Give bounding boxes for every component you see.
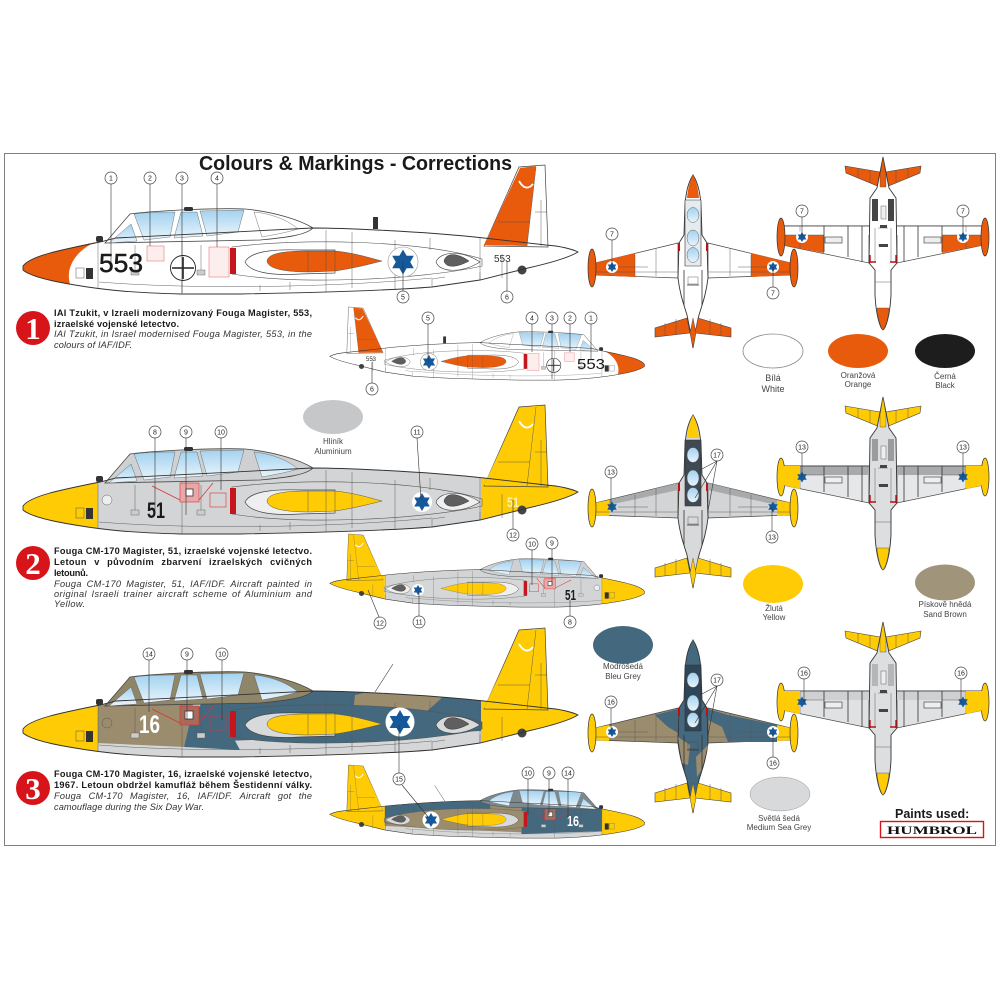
humbrol logo [880,822,984,838]
callouts aircraft 3 side: 14 [145,651,153,658]
callouts aircraft 3 side: 10 [218,651,226,658]
swatch yellow [743,565,803,622]
aircraft 2 side view, small [330,534,644,629]
swatch bleu grey [593,626,653,681]
aircraft 2 side view, small: 9 [550,540,554,547]
humbrol logo: HUMBROL [887,825,977,837]
swatch sand brown [915,564,975,619]
sheet frame [4,154,996,846]
callouts aircraft 2 top: 13 [607,469,615,476]
badge 2 [16,546,50,581]
swatch yellow: Yellow [763,613,786,622]
paints used label: Paints used: [895,807,969,821]
swatch bleu grey: Modrošedá [603,662,644,671]
callouts aircraft 2 top: 13 [768,534,776,541]
badge 1 [16,311,50,346]
swatch aluminium [303,400,363,456]
swatch black: Černá [934,372,956,381]
callouts aircraft 2 underside [796,441,969,477]
aircraft 1 side view, small: 6 [370,386,374,393]
callouts aircraft 2 side: 11 [413,429,421,436]
caption 2: Yellow. [54,599,85,609]
callouts aircraft 2 top: 17 [713,452,721,459]
tail number 51: 51 [507,494,519,510]
callouts aircraft 3 underside [798,667,967,702]
callouts aircraft 3 top: 16 [769,760,777,767]
swatch aluminium: Hliník [323,437,344,446]
swatch sand brown: Pískově hnědá [919,600,972,609]
aircraft 1 underside view: 7 [961,208,965,215]
roundel [388,247,418,277]
aircraft 2 side view, small: 10 [528,541,536,548]
aircraft 3 side view, small: 10 [524,770,532,777]
callouts aircraft 2 side: 8 [153,429,157,436]
aircraft 2 top view [588,415,798,588]
aircraft 2 side view, small: 12 [376,620,384,627]
caption 1 [54,308,312,350]
stencil markings [147,246,229,277]
swatch medium sea grey: Medium Sea Grey [747,823,811,832]
aircraft 1 top view [588,175,798,348]
roundel 3 [386,708,414,736]
callouts aircraft 3 top: 17 [713,677,721,684]
badge 3: 3 [25,771,41,806]
swatch black [915,334,975,390]
aircraft 2 side view, small: 8 [568,619,572,626]
callouts aircraft 3 side [143,648,405,785]
callouts aircraft 3 underside: 16 [957,670,965,677]
swatch white: White [761,384,785,394]
callouts aircraft 2 side [149,426,519,541]
aircraft 1 side view, large [23,165,578,294]
tail number: 553 [494,254,511,265]
aircraft 1 top view: 7 [610,231,614,238]
swatch orange [828,334,888,389]
aircraft 1 side view, small: 5 [426,315,430,322]
swatch black: Black [935,381,956,390]
caption 3: 1967. Letoun obdržel kamufláž během Šestidenní války. [54,779,312,790]
black emblem [170,256,196,280]
aircraft 1 top view: 7 [771,290,775,297]
callouts aircraft 1 side: 3 [180,175,184,182]
callouts aircraft 1 side: 6 [505,294,509,301]
swatch white: Bílá [765,373,781,383]
roundel 2 [412,492,432,512]
caption 2: Fouga CM-170 Magister, 51, izraelské vojenské letectvo. [54,546,312,556]
aircraft 1 side view, small: 3 [550,315,554,322]
aircraft 1 side view, small: 2 [568,315,572,322]
aircraft 3 side view, large [23,628,578,757]
callouts aircraft 2 top [605,449,778,543]
aircraft 3 underside view [777,622,989,795]
caption 1: colours of IAF/IDF. [54,340,132,350]
aircraft 3 side view, small: 16 [567,813,579,830]
badge 2: 2 [25,546,41,581]
swatch medium sea grey: Světlá šedá [758,814,800,823]
callouts aircraft 2 underside: 13 [798,444,806,451]
caption 3 [54,769,312,812]
caption 3: Fouga CM-170 Magister, 16, izraelské vojenské letectvo, [54,769,312,779]
aircraft 1 side view, small [330,307,644,395]
badge 3 [16,771,50,806]
title: Colours & Markings - Corrections [199,153,512,175]
number 51: 51 [147,498,165,523]
callouts aircraft 2 side: 9 [184,429,188,436]
callouts aircraft 3 side: 9 [185,651,189,658]
aircraft 3 side view, small: 14 [564,770,572,777]
aircraft 1 side view, small: 4 [530,315,534,322]
caption 1: izraelské vojenské letectvo. [54,319,179,329]
caption 3: camouflage during the Six Day War. [54,802,204,812]
callouts aircraft 1 side: 5 [401,294,405,301]
caption 1: IAI Tzukit, in Israel modernised Fouga Magister, 553, in the [54,329,312,339]
aircraft 2 side view, small: 11 [415,619,423,626]
callouts aircraft 1 side: 1 [109,175,113,182]
callouts aircraft 3 top: 16 [607,699,615,706]
callouts aircraft 2 underside: 13 [959,444,967,451]
callouts aircraft 1 side: 2 [148,175,152,182]
aircraft 3 side view, small [330,765,644,838]
aircraft 1 underside view [777,157,989,330]
swatch white [743,334,803,394]
swatch yellow: Žlutá [765,604,783,613]
swatch sand brown: Sand Brown [923,610,967,619]
aircraft 1 side view, small: 553 [366,357,377,363]
callouts aircraft 1 side [105,172,513,303]
swatch medium sea grey [747,777,811,832]
swatch orange: Oranžová [841,371,876,380]
caption 1: IAI Tzukit, v Izraeli modernizovaný Fouga Magister, 553, [54,308,312,318]
aircraft 2 side view, large [23,405,578,534]
aircraft 3 side view, small: 9 [547,770,551,777]
caption 2: original Israeli trainer aircraft scheme of Aluminium and [54,589,313,599]
callouts aircraft 1 side: 4 [215,175,219,182]
callouts aircraft 3 underside: 16 [800,670,808,677]
caption 2: letounů. [54,568,88,578]
callouts aircraft 2 side: 10 [217,429,225,436]
aircraft 3 top view [588,640,798,813]
badge 1: 1 [25,311,41,346]
callouts aircraft 2 side: 12 [509,532,517,539]
swatch aluminium: Aluminium [314,447,352,456]
aircraft 2 underside view [777,397,989,570]
swatch orange: Orange [845,380,872,389]
callouts aircraft 3 side: 15 [395,776,403,783]
aircraft 2 side view, small: 51 [565,587,576,604]
number 16: 16 [139,711,160,739]
caption 3: Fouga CM-170 Magister, 16, IAF/IDF. Aircraft got the [54,791,312,801]
caption 2: Fouga CM-170 Magister, 51, IAF/IDF. Aircraft painted in [54,579,312,589]
swatch bleu grey: Bleu Grey [605,672,641,681]
caption 2 [54,546,313,609]
aircraft 1 side view, small: 1 [589,315,593,322]
registration number 553: 553 [99,248,143,278]
aircraft 1 side view, small: 553 [577,356,605,373]
caption 2: Letoun v původním zbarvení izraelských cvičných [54,557,312,567]
aircraft 1 underside view: 7 [800,208,804,215]
callouts aircraft 3 top [605,674,779,769]
